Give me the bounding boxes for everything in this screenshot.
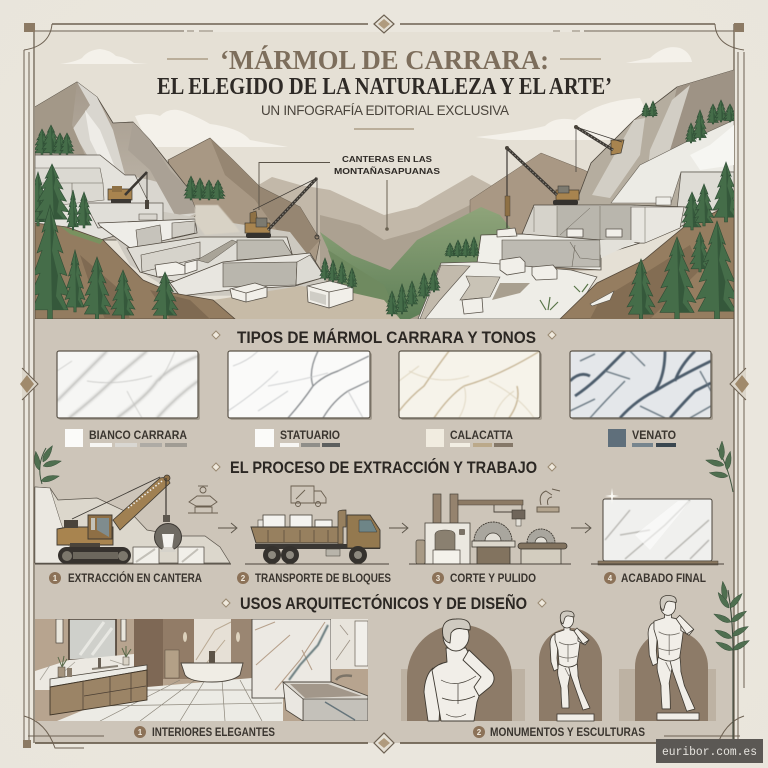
green valley <box>320 207 520 319</box>
step label 4: ACABADO FINAL <box>621 573 706 585</box>
usage labels <box>134 726 645 739</box>
right ground and rocks <box>418 262 597 319</box>
step label 3: CORTE Y PULIDO <box>450 573 536 585</box>
left quarry terraces <box>35 155 325 296</box>
step label 3 <box>432 572 536 585</box>
step label 1: EXTRACCIÓN EN CANTERA <box>68 572 202 585</box>
marble swatch calacatta <box>399 351 542 420</box>
callout: canteras <box>259 154 440 231</box>
label interiores: INTERIORES ELEGANTES <box>152 727 275 739</box>
excavator <box>57 475 170 564</box>
crane upper left <box>108 172 157 220</box>
step 3: cutting and polishing machinery <box>409 494 571 564</box>
upper right trees <box>642 100 736 143</box>
valley pines <box>320 237 479 316</box>
label bianco carrara <box>65 429 187 447</box>
panel: venato <box>570 351 713 447</box>
right quarry blocks <box>462 228 622 314</box>
bathtub <box>181 663 243 682</box>
arrow: step 1 to 2 <box>218 523 237 533</box>
label interiores: 1 <box>138 728 143 737</box>
right quarry walls <box>477 172 734 270</box>
step label 2: 2 <box>241 574 246 583</box>
heading: proceso: EL PROCESO DE EXTRACCIÓN Y TRABAJO <box>230 458 537 477</box>
mountain trees back <box>34 125 225 200</box>
heading: tipos de mármol: TIPOS DE MÁRMOL CARRARA Y TONOS <box>237 328 536 347</box>
statue large <box>424 619 494 721</box>
title <box>157 45 612 129</box>
step 2: truck <box>245 510 389 564</box>
statue medium <box>550 611 594 721</box>
left mountain <box>35 82 197 240</box>
leaf sprig left <box>33 444 62 484</box>
side walls <box>401 669 525 721</box>
back wall <box>134 619 252 687</box>
icon: truck outline <box>291 486 326 506</box>
arrow: step 3 to 4 <box>571 523 591 533</box>
crane right upper <box>574 125 624 172</box>
grab claw <box>154 524 182 552</box>
step label 3: 3 <box>436 574 441 583</box>
callout: canteras: MONTAÑASAPUANAS <box>334 166 440 176</box>
heading: usos <box>50 593 705 613</box>
heading: proceso <box>73 458 696 477</box>
step 1: excavator scene <box>35 475 231 564</box>
statue tall <box>648 595 699 720</box>
blocks <box>133 547 159 564</box>
panel: calacatta <box>399 351 542 447</box>
far mountains <box>260 175 492 268</box>
brown hill <box>470 153 600 270</box>
niches <box>407 625 512 721</box>
stairs niche <box>165 650 179 678</box>
label venato <box>608 429 676 447</box>
ground line <box>35 563 231 565</box>
dust and rubble <box>195 205 240 235</box>
panel: bianco carrara <box>57 351 200 447</box>
icon: sculptor tool <box>537 489 560 512</box>
floor <box>57 678 283 721</box>
mirror <box>56 619 126 660</box>
title: UN INFOGRAFÍA EDITORIAL EXCLUSIVA <box>261 103 509 118</box>
title: EL ELEGIDO DE LA NATURALEZA Y EL ARTE’ <box>157 74 612 100</box>
mountain quarry landscape <box>28 47 739 319</box>
label calacatta <box>426 429 513 447</box>
watermark: euribor.com.es <box>662 745 757 759</box>
truck cargo <box>258 515 332 528</box>
label venato: VENATO <box>632 430 676 442</box>
step labels <box>49 572 706 585</box>
right tub <box>283 676 368 721</box>
rock background <box>35 487 230 563</box>
quarry blocks left <box>155 260 353 308</box>
arrow: step 2 to 3 <box>389 523 408 533</box>
big marble wall <box>252 619 368 698</box>
truck body <box>251 527 343 543</box>
crane right lower <box>505 146 579 228</box>
callout: canteras: CANTERAS EN LAS <box>342 154 432 164</box>
right hillside cliffs <box>577 70 734 210</box>
middle mountain <box>168 138 320 265</box>
marble swatch venato <box>570 351 713 420</box>
step 4: polished slab <box>591 488 724 565</box>
ground and brown hillside left <box>35 223 400 319</box>
leaf sprig right <box>705 441 733 492</box>
clouds <box>60 47 692 147</box>
marble swatch bianco <box>57 351 200 420</box>
label monumentos: MONUMENTOS Y ESCULTURAS <box>490 727 645 739</box>
step label 4: 4 <box>608 574 613 583</box>
sculpture panels <box>401 595 716 721</box>
foreground pines <box>28 162 739 319</box>
interior image: marble bathroom <box>35 619 368 721</box>
panel: statuario <box>228 351 372 447</box>
leaf sprig lower right <box>713 581 751 740</box>
step label 1: 1 <box>53 574 58 583</box>
step label 2: TRANSPORTE DE BLOQUES <box>255 573 391 585</box>
label statuario: STATUARIO <box>280 430 340 442</box>
backsplash <box>35 654 134 690</box>
heading: usos: USOS ARQUITECTÓNICOS Y DE DISEÑO <box>240 593 527 613</box>
label statuario <box>255 429 340 447</box>
heading: tipos de mármol <box>56 328 712 347</box>
icon: sculptor <box>188 486 218 513</box>
marble swatch statuario <box>228 351 372 420</box>
quarry rock base <box>116 212 326 296</box>
label bianco carrara: BIANCO CARRARA <box>89 430 187 442</box>
label monumentos: 2 <box>477 728 482 737</box>
header panel background <box>35 32 734 320</box>
watermark <box>656 739 763 763</box>
crane centre <box>245 178 319 239</box>
label calacatta: CALACATTA <box>450 430 513 442</box>
lower tan panel background <box>35 319 734 743</box>
right brown hillside <box>540 203 734 319</box>
title: ‘MÁRMOL DE CARRARA: <box>220 45 549 75</box>
vanity <box>50 646 147 715</box>
